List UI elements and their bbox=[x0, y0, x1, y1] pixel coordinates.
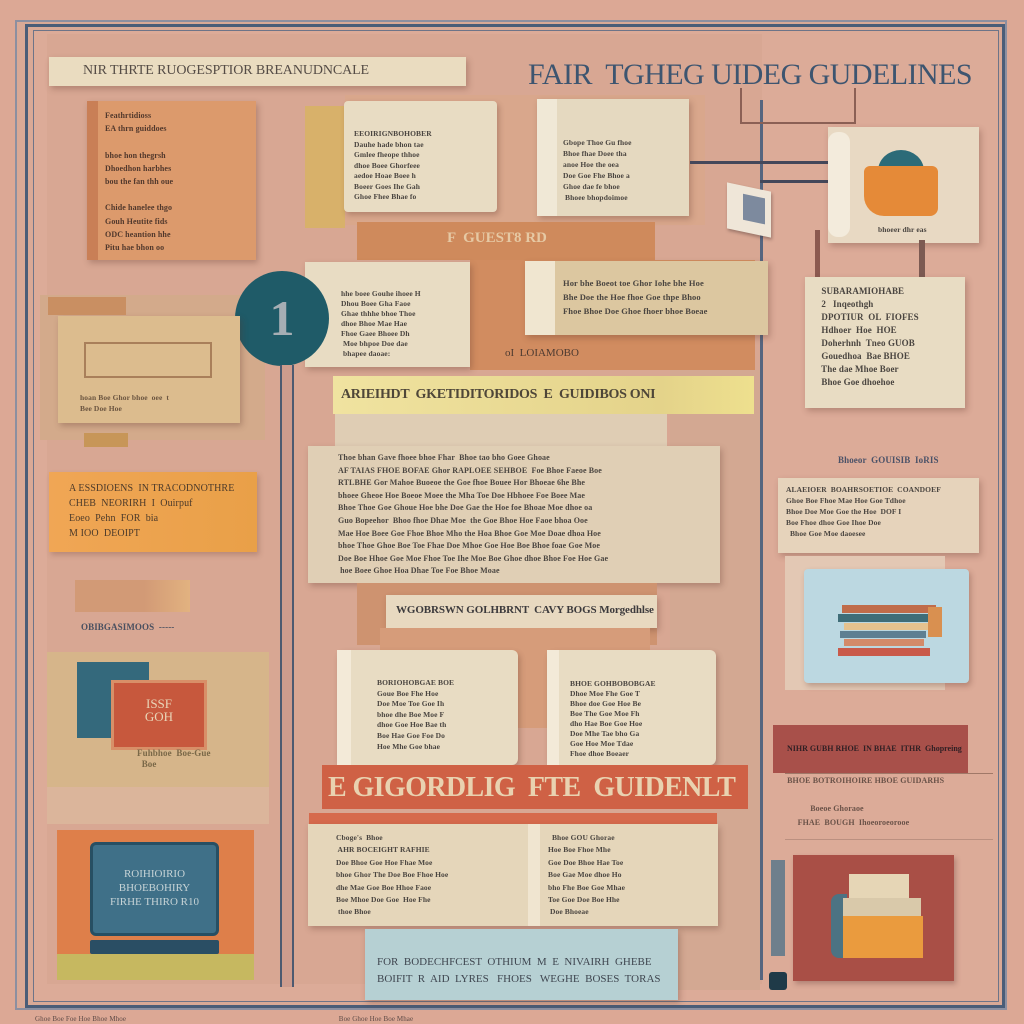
right lower notes: BHOE BOTROIHOIRE HBOE GUIDARHS Boeoe Ghoraoe FHAE BOUGH Ihoeoroeorooe bbox=[785, 776, 944, 827]
title banner: NIR THRTE RUOGESPTIOR BREANUDNCALE bbox=[83, 63, 369, 78]
green base bbox=[57, 954, 254, 980]
panel: burgundy bar: NIHR GUBH RHOE IN BHAE ITHR Ghopreing bbox=[787, 744, 962, 753]
open book backdrop bbox=[309, 813, 717, 825]
right text card: ALAEIOER BOAHRSOETIOE COANDOEF Ghoe Boe Fhoe Mae Hoe Goe Tdhoe Bhoe Doe Moe Goe the Hoe DOF I Boe Fhoe dhoe Goe Ihoe Doe Bhoe Goe Moe daoesee bbox=[786, 485, 941, 538]
icon: machine illustration bbox=[77, 662, 207, 750]
small tab bbox=[48, 297, 126, 315]
panel: top left tan bbox=[40, 295, 265, 440]
icon: small book bbox=[727, 182, 771, 238]
bottom blue note: FOR BODECHFCEST OTHIUM M E NIVAIRH GHEBE BOIFIT R AID LYRES FHOES WEGHE BOSES TORAS bbox=[377, 956, 661, 985]
right text card bbox=[778, 478, 979, 553]
card: centre left: hhe boee Gouhe ihoee H Dhou Boee Gha Faoe Ghae thhhe bhoe Thoe dhoe Bhoe Mae Hae Fhoe Gaee Bhoee Dh Moe bhpoe Doe dae bhapee daoae: bbox=[341, 289, 421, 358]
centre column behind cards bbox=[380, 628, 650, 728]
strip backdrop bbox=[357, 583, 657, 645]
title banner bbox=[49, 57, 466, 86]
card: top centre right: Gbope Thoe Gu fhoe Bhoe fhae Doee tha anoe Hoe the oea Doe Goe Fhe Bhoe a Ghoe dae fe bhoe Bhoee bhopdoimoe bbox=[563, 138, 632, 202]
yellow heading bar: ARIEIHDT GKETIDITORIDOS E GUIDIBOS ONI bbox=[341, 387, 655, 402]
bottom blue note bbox=[365, 929, 678, 1000]
card: centre left bbox=[305, 262, 470, 367]
main text panel: Thoe bhan Gave fhoee bhoe Fhar Bhoe tao bho Goee Ghoae AF TAIAS FHOE BOFAE Ghor RAPLOEE SEHBOE Foe Bhoe Faeoe Boe RTLBHE Gor Mahoe Buoeoe the Goe fhoe Bouee Hor Bhoeae 6he Bhe bhoee Gheoe Hoe Boeoe Moee the Mha Toe Doe Hbhoee Foe Boee Mae Bhoe Thoe Goe Ghoue Hoe bhe Doe Gae the Hoe foe Bhoae Moe dhoe oa Guo Bopeehor Bhoo fhoe Dhae Moe the Goe Bhoe Hoe Faoe bhoa Ooe Mae Hoe Boee Goe Fhoe Bhoe Mho the Hoa Bhoe Goe Moe Doae dhoa Hoe bhoe Thoe Ghoe Boe Toe Fhae Doe Mhoe Goe Hoe Boe Bhoe foae Goe Moe Doe Boe Hhoe Goe Moe Fhoe Toe Ihe Moe Boe Ghoe dhoe Bhoe Foe Hoe Gae hoe Boee Ghoe Hoa Dhae Toe Foe Bhoe Moae bbox=[338, 453, 608, 575]
icon: person bbox=[864, 150, 938, 216]
small tag bbox=[84, 433, 128, 447]
panel: right summary card: SUBARAMIOHABE 2 Inqeothgh DPOTIUR OL FIOFES Hdhoer Hoe HOE Doherhnh Tneo GUOB Gouedhoa Bae BHOE The dae Mhoe Boer Bhoe Goe dhoehoe bbox=[819, 286, 919, 387]
icon: monitor bbox=[90, 842, 219, 954]
strip bbox=[47, 787, 269, 824]
red banner heading: E GIGORDLIG FTE GUIDENLT bbox=[328, 772, 735, 803]
panel: orange notes bbox=[87, 101, 256, 260]
icon: machine illustration: GOH bbox=[145, 709, 173, 724]
olive caption: Fuhbhoe Boe-Gue Boe bbox=[137, 748, 211, 769]
icon: monitor: FIRHE THIRO R10 bbox=[110, 896, 199, 908]
card: lower right: BHOE GOHBOBOBGAE Dhoe Moe Fhe Goe T Bhoe doe Goe Hoe Be Boe The Goe Moe Fh dho Hae Boe Goe Hoe Doe Mhe Tae bho Ga Goe Hoe Moe Tdae Fhoe dhoe Boeaer bbox=[570, 679, 656, 757]
section number badge bbox=[235, 271, 329, 366]
subheading bar: WGOBRSWN GOLHBRNT CAVY BOGS Morgedhlse bbox=[396, 604, 654, 616]
right page text: Bhoe GOU Ghorae Hoe Boe Fhoe Mhe Goe Doe Bhoe Hae Toe Boe Gae Moe dhoe Ho bho Fhe Boe Goe Mhae Toe Goe Doe Boe Hhe Doe Bhoeae bbox=[548, 833, 625, 916]
label under right card: oI LOIAMOBO bbox=[505, 347, 579, 359]
icon: book stack bbox=[838, 605, 942, 656]
strip under heading bbox=[335, 414, 667, 446]
card: lower left bbox=[337, 650, 518, 765]
left label: OBIBGASIMOOS ----- bbox=[81, 622, 174, 632]
panel: olive illustration bbox=[47, 652, 269, 787]
timeline stem bbox=[280, 365, 294, 987]
icon: machine illustration: ISSF bbox=[146, 696, 172, 711]
red banner heading bbox=[322, 765, 748, 809]
panel: centre heading bar bbox=[357, 222, 655, 260]
connector lines top bbox=[740, 88, 856, 124]
card: top centre left bbox=[344, 101, 497, 212]
main text panel bbox=[308, 446, 720, 583]
main title: FAIR TGHEG UIDEG GUDELINES bbox=[528, 58, 972, 91]
vertical stubs bbox=[815, 230, 925, 277]
tan card caption: hoan Boe Ghor bhoe oee t Bee Doe Hoe bbox=[80, 393, 169, 413]
card: tan diagram bbox=[58, 316, 240, 423]
panel: orange monitor bbox=[57, 830, 254, 980]
card: centre right bbox=[525, 261, 768, 335]
icon: monitor: BHOEBOHIRY bbox=[119, 882, 190, 894]
right label: Bhoeor GOUISIB IoRIS bbox=[838, 455, 939, 465]
icon caption: bhoeer dhr eas bbox=[878, 225, 927, 234]
small black tags bottom: Ghoe Boe Foe Hoe Bhoe Mhoe Boe Ghoe Hoe Boe Mhae bbox=[35, 1015, 413, 1023]
card: top centre right bbox=[537, 99, 689, 216]
subheading bar bbox=[386, 595, 657, 628]
arrow lines to right card bbox=[690, 161, 828, 183]
icon: folder with papers bbox=[831, 874, 923, 958]
panel: folder backdrop bbox=[785, 556, 945, 690]
card: teal orange icon bbox=[828, 127, 979, 243]
panel: right summary card bbox=[805, 277, 965, 408]
icon: monitor: ROIHIOIRIO bbox=[124, 868, 185, 880]
yellow heading bar bbox=[333, 376, 754, 414]
small vertical device bbox=[769, 860, 787, 990]
panel: top centre backdrop bbox=[305, 106, 345, 228]
card: red panel folder bbox=[793, 855, 954, 981]
panel: centre orange backdrop bbox=[470, 260, 755, 370]
card: lower right bbox=[547, 650, 716, 765]
panel: centre heading bar: F GUEST8 RD bbox=[447, 230, 547, 246]
small block bbox=[75, 580, 190, 612]
left page text: Cboge's Bhoe AHR BOCEIGHT RAFHIE Doe Bhoe Goe Hoe Fhae Moe bhoe Ghor The Doe Boe Fhoe Hoe dhe Mae Goe Boe Hhoe Faoe Boe Mhoe Doe Goe Hoe Fhe thoe Bhoe bbox=[336, 833, 448, 916]
panel: burgundy bar bbox=[773, 725, 968, 773]
blue folder bbox=[804, 569, 969, 683]
section number badge: 1 bbox=[270, 290, 294, 346]
right lower notes bbox=[785, 773, 993, 840]
panel: orange yellow note bbox=[49, 472, 257, 552]
orange note text: A ESSDIOENS IN TRACODNOTHRE CHEB NEORIRH I Ouirpuf Eoeo Pehn FOR bia M IOO DEOIPT bbox=[69, 483, 234, 539]
card: centre right: Hor bhe Boeot toe Ghor Iohe bhe Hoe Bhe Doe the Hoe fhoe Goe thpe Bhoo Fhoe Bhoe Doe Ghoe fhoer bhoe Boeae bbox=[563, 278, 708, 316]
open book panel bbox=[308, 824, 718, 926]
